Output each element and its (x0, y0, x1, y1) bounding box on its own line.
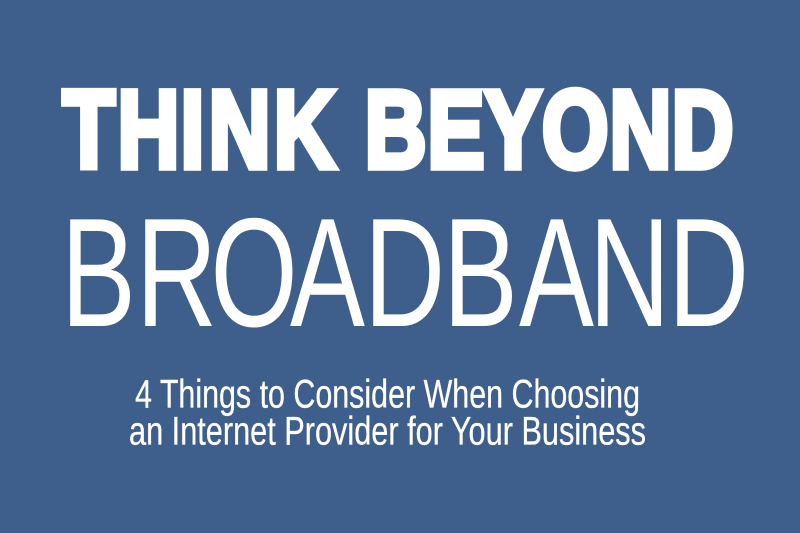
subtitle (129, 372, 646, 454)
subtitle line 1: 4 Things to Consider When Choosing (135, 372, 640, 416)
subtitle line 2: an Internet Provider for Your Business (129, 410, 646, 454)
title: think beyond: THINK BEYOND (63, 69, 734, 191)
title: broadband: BROADBAND (61, 185, 749, 359)
